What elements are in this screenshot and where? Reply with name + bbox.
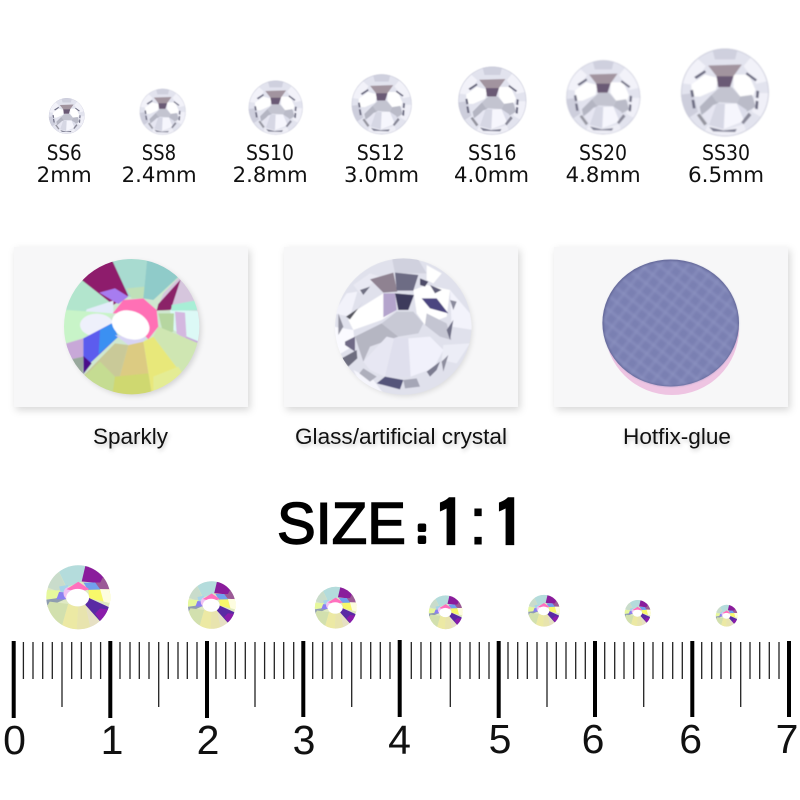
label SS8: SS8 bbox=[142, 141, 176, 165]
gem SS20 bbox=[565, 58, 645, 138]
scale numbers bbox=[3, 716, 798, 763]
label SS6: SS6 bbox=[47, 141, 82, 165]
title: 1 bbox=[493, 492, 525, 554]
scale numbers: 0 bbox=[3, 717, 26, 763]
label 4.8mm: 4.8mm bbox=[566, 163, 641, 187]
actual-size iridescent gems bbox=[36, 560, 739, 634]
icon: clear crystal gem bbox=[333, 257, 473, 396]
icon: iridescent gem bbox=[64, 259, 203, 398]
gem 2 bbox=[180, 577, 239, 632]
scale numbers: 2 bbox=[197, 717, 219, 763]
label SS30: SS30 bbox=[702, 141, 750, 165]
scale numbers: 1 bbox=[101, 717, 123, 763]
icon: glue backing disc bbox=[602, 260, 739, 395]
gem 1 bbox=[36, 560, 115, 634]
caption: Glass/artificial crystal: Glass/artificial crystal bbox=[295, 424, 507, 449]
gem 5 bbox=[523, 592, 562, 629]
scale numbers: 5 bbox=[489, 716, 511, 762]
label SS20: SS20 bbox=[579, 141, 627, 165]
caption: Hotfix-glue: Hotfix-glue bbox=[623, 424, 731, 449]
panel: sparkly bbox=[14, 240, 248, 449]
scale numbers: 3 bbox=[293, 717, 315, 763]
label 6.5mm: 6.5mm bbox=[688, 163, 764, 187]
gem 3 bbox=[308, 583, 360, 631]
title: : bbox=[417, 513, 427, 549]
title bbox=[277, 484, 525, 558]
gem 4 bbox=[423, 592, 465, 632]
title: SIZE bbox=[277, 492, 406, 556]
title: 1 bbox=[434, 492, 466, 554]
panel: hotfix glue bbox=[554, 247, 788, 449]
label 4.0mm: 4.0mm bbox=[454, 163, 529, 187]
size chart row bbox=[37, 46, 774, 187]
gem SS30 bbox=[679, 46, 774, 140]
gem SS10 bbox=[248, 79, 306, 137]
scale numbers: 6 bbox=[582, 716, 604, 762]
label 2.8mm: 2.8mm bbox=[233, 163, 308, 187]
label SS12: SS12 bbox=[357, 141, 405, 165]
gem 7 bbox=[712, 603, 739, 628]
caption: Sparkly: Sparkly bbox=[93, 424, 169, 449]
ruler bbox=[3, 640, 798, 763]
gem SS8 bbox=[139, 87, 188, 137]
label 3.0mm: 3.0mm bbox=[344, 163, 419, 187]
gem 6 bbox=[621, 598, 653, 628]
label 2.4mm: 2.4mm bbox=[122, 163, 197, 187]
gem SS12 bbox=[351, 72, 415, 137]
label SS10: SS10 bbox=[246, 141, 294, 165]
scale numbers: 6 bbox=[679, 716, 702, 762]
label SS16: SS16 bbox=[468, 141, 516, 165]
scale numbers: 4 bbox=[388, 717, 411, 763]
title: : bbox=[469, 484, 487, 558]
panel: glass crystal bbox=[284, 247, 518, 449]
gem SS16 bbox=[457, 65, 530, 138]
label 2mm: 2mm bbox=[37, 163, 92, 187]
major ticks bbox=[14, 640, 789, 718]
minor ticks bbox=[23, 642, 779, 679]
scale numbers: 7 bbox=[776, 716, 798, 762]
half-unit ticks bbox=[62, 642, 741, 707]
gem SS6 bbox=[48, 97, 87, 136]
